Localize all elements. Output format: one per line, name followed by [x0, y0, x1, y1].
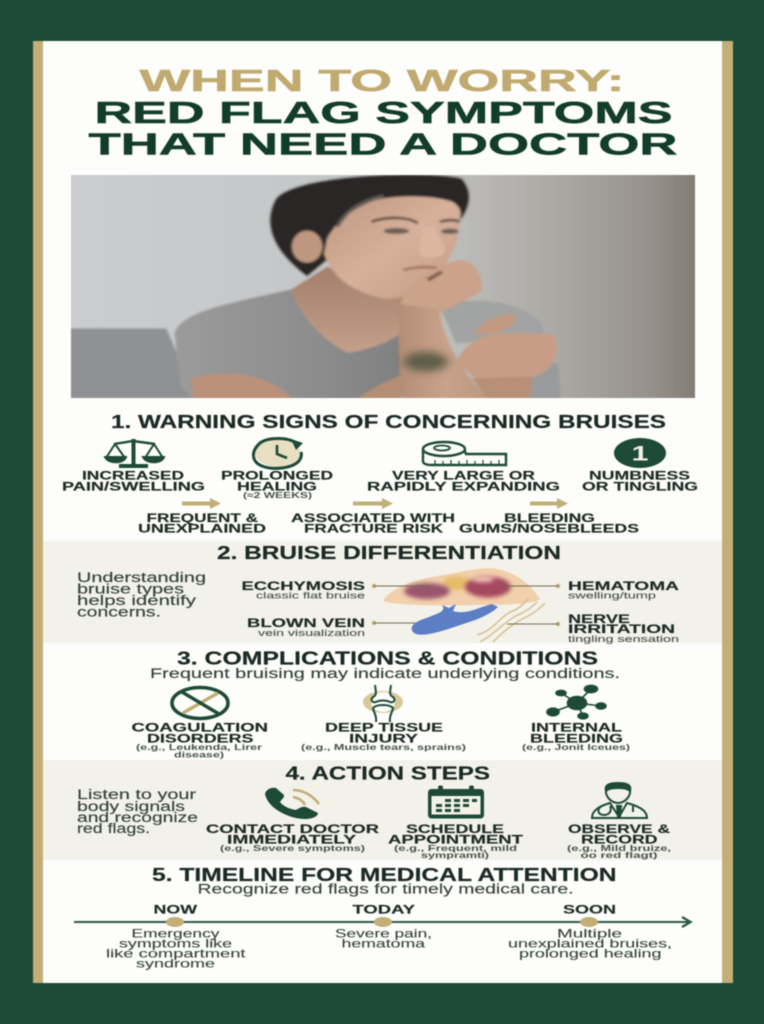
title: WHEN TO WORRY:	[140, 63, 624, 98]
today description: hematoma	[342, 936, 425, 950]
label: fracture risk: FRACTURE RISK	[304, 522, 443, 536]
label: prolonged healing: HEALING	[237, 480, 317, 494]
section 2 heading: 2. BRUISE DIFFERENTIATION	[217, 543, 561, 563]
soon description: prolonged healing	[519, 946, 662, 960]
title	[88, 63, 678, 162]
section 3 heading: 3. COMPLICATIONS & CONDITIONS	[177, 648, 598, 668]
label: coagulation disorders	[132, 720, 268, 760]
icon: measuring tape	[423, 442, 506, 465]
label: observe and record: oo red flagt)	[580, 850, 658, 860]
icon: numbered circle	[614, 438, 666, 468]
label: numbness: NUMBNESS	[589, 468, 690, 482]
now label: NOW	[154, 902, 198, 916]
intro text: body signals	[77, 799, 185, 814]
intro text: Understanding	[77, 570, 206, 585]
callout: blown vein	[247, 616, 415, 639]
intro text	[77, 787, 198, 836]
label: coagulation disorders: disease)	[174, 750, 224, 760]
label: deep tissue injury	[301, 720, 466, 752]
label: prolonged healing	[221, 468, 333, 500]
now description	[106, 926, 247, 970]
label: observe and record	[567, 822, 671, 860]
label: schedule appointment: (e.g., Frequent, mild	[394, 843, 517, 853]
label: numbness	[582, 468, 698, 494]
label: contact doctor: IMMEDIATELY	[227, 832, 356, 846]
callout: nerve irritation: tingling sensation	[568, 634, 679, 645]
label: very large: VERY LARGE OR	[392, 468, 535, 482]
now description: syndrome	[136, 956, 215, 970]
callout: ecchymosis: classic flat bruise	[256, 590, 365, 602]
label: internal bleeding	[522, 720, 630, 752]
label: observe and record: OBSERVE &	[568, 822, 670, 836]
section 1 heading: 1. WARNING SIGNS OF CONCERNING BRUISES	[111, 412, 666, 432]
intro text: helps identify	[77, 593, 196, 608]
callout: nerve irritation: IRRITATION	[568, 622, 675, 636]
label: schedule appointment	[388, 822, 524, 860]
timeline arrow	[74, 917, 690, 927]
intro text: concerns.	[77, 604, 161, 620]
label: bleeding: BLEEDING	[504, 511, 595, 525]
label: prolonged healing: (≈2 WEEKS)	[243, 490, 312, 500]
callout: hematoma	[503, 579, 680, 602]
label: contact doctor	[206, 822, 379, 853]
now description: Emergency	[132, 926, 220, 940]
now description: symptoms like	[119, 936, 232, 950]
label: internal bleeding: INTERNAL	[531, 720, 622, 734]
section 5: timeline	[74, 865, 690, 970]
intro text: and recognize	[77, 810, 198, 825]
arrow 3	[530, 498, 568, 509]
section 5 subtitle: Recognize red flags for timely medical care.	[198, 882, 574, 896]
label: increased pain	[62, 468, 205, 494]
timeline dot: now	[166, 917, 184, 927]
label: coagulation disorders: COAGULATION	[132, 720, 268, 734]
today description	[335, 926, 432, 950]
label: bleeding: GUMS/NOSEBLEEDS	[459, 522, 639, 536]
icon: clock with return arrow	[253, 438, 303, 468]
arrow 1	[182, 498, 221, 509]
callout: nerve irritation: NERVE	[568, 612, 630, 626]
icon: balance scales	[105, 439, 164, 466]
label: numbness: OR TINGLING	[582, 480, 698, 494]
intro text	[77, 570, 206, 620]
label: frequent	[138, 511, 266, 536]
section 2: bruise differentiation	[43, 541, 722, 645]
label: bleeding	[459, 511, 639, 536]
icon: phone	[265, 788, 319, 819]
label: observe and record: (e.g., Mild bruize,	[567, 843, 671, 853]
label: very large	[367, 468, 560, 494]
icon: prohibited coagulation	[172, 688, 228, 718]
now description: like compartment	[106, 946, 247, 960]
label: fracture risk: ASSOCIATED WITH	[291, 511, 455, 525]
label: contact doctor: (e.g., Severe symptoms)	[220, 843, 365, 853]
label: coagulation disorders: (e.g., Leukenda, Lirer	[136, 742, 263, 752]
today description: Severe pain,	[335, 926, 432, 940]
callout: ecchymosis	[242, 579, 430, 602]
label: schedule appointment: APPOINTMENT	[388, 832, 524, 846]
icon: molecule network	[547, 685, 606, 719]
label: prolonged healing: PROLONGED	[221, 468, 333, 482]
photo: worried woman with bruised forearm	[70, 174, 696, 399]
callout: blown vein: BLOWN VEIN	[247, 616, 365, 630]
intro text: Listen to your	[77, 787, 197, 802]
label: increased pain: PAIN/SWELLING	[62, 480, 205, 494]
callout: blown vein: vein visualization	[258, 628, 365, 639]
label: very large: RAPIDLY EXPANDING	[367, 480, 560, 494]
label: frequent: FREQUENT &	[146, 511, 258, 525]
label: internal bleeding: (e.g., Jonit Iceues)	[522, 742, 630, 752]
label: deep tissue injury: DEEP TISSUE	[325, 720, 443, 734]
soon description	[508, 926, 672, 960]
label: coagulation disorders: DISORDERS	[147, 732, 254, 746]
icon: calendar	[428, 786, 484, 818]
section 4: action steps	[43, 760, 722, 860]
label: increased pain: INCREASED	[82, 468, 184, 482]
icon: numbered circle: 1	[632, 442, 649, 466]
label: internal bleeding: BLEEDING	[530, 732, 623, 746]
callout: ecchymosis: ECCHYMOSIS	[242, 579, 365, 593]
label: contact doctor: CONTACT DOCTOR	[206, 822, 379, 836]
label: observe and record: RECORD	[581, 832, 658, 846]
title: RED FLAG SYMPTOMS	[94, 95, 672, 130]
icon: doctor	[592, 783, 647, 818]
intro text: bruise types	[77, 582, 184, 596]
diagram: skin cross-section with bruises	[383, 568, 545, 642]
section 3 subtitle: Frequent bruising may indicate underlying conditions.	[150, 666, 620, 681]
callout: hematoma: HEMATOMA	[568, 579, 680, 593]
label: deep tissue injury: INJURY	[349, 732, 418, 746]
arrow 2	[353, 498, 393, 509]
label: fracture risk	[291, 511, 455, 536]
label: schedule appointment: sympramti)	[421, 850, 489, 860]
section 4 band	[43, 760, 722, 860]
section 2 band	[43, 541, 722, 643]
label: schedule appointment: SCHEDULE	[406, 822, 504, 836]
label: deep tissue injury: (e.g., Muscle tears, sprains)	[301, 742, 466, 752]
timeline dot: soon	[580, 917, 598, 927]
label: frequent: UNEXPLAINED	[138, 522, 266, 536]
soon description: unexplained bruises,	[508, 936, 672, 950]
intro text: red flags.	[77, 821, 150, 836]
section 1: warning signs	[62, 412, 698, 536]
today label: TODAY	[352, 902, 415, 916]
callout: nerve irritation	[507, 612, 679, 645]
soon label: SOON	[563, 902, 616, 916]
icon: knee joint	[363, 685, 403, 722]
section 3: complications	[132, 648, 630, 760]
title: THAT NEED A DOCTOR	[88, 126, 678, 162]
timeline dot: today	[374, 917, 392, 927]
section 4 heading: 4. ACTION STEPS	[286, 764, 490, 784]
callout: hematoma: swelling/tump	[568, 590, 656, 602]
section 5 heading: 5. TIMELINE FOR MEDICAL ATTENTION	[152, 865, 616, 885]
soon description: Multiple	[557, 926, 622, 940]
